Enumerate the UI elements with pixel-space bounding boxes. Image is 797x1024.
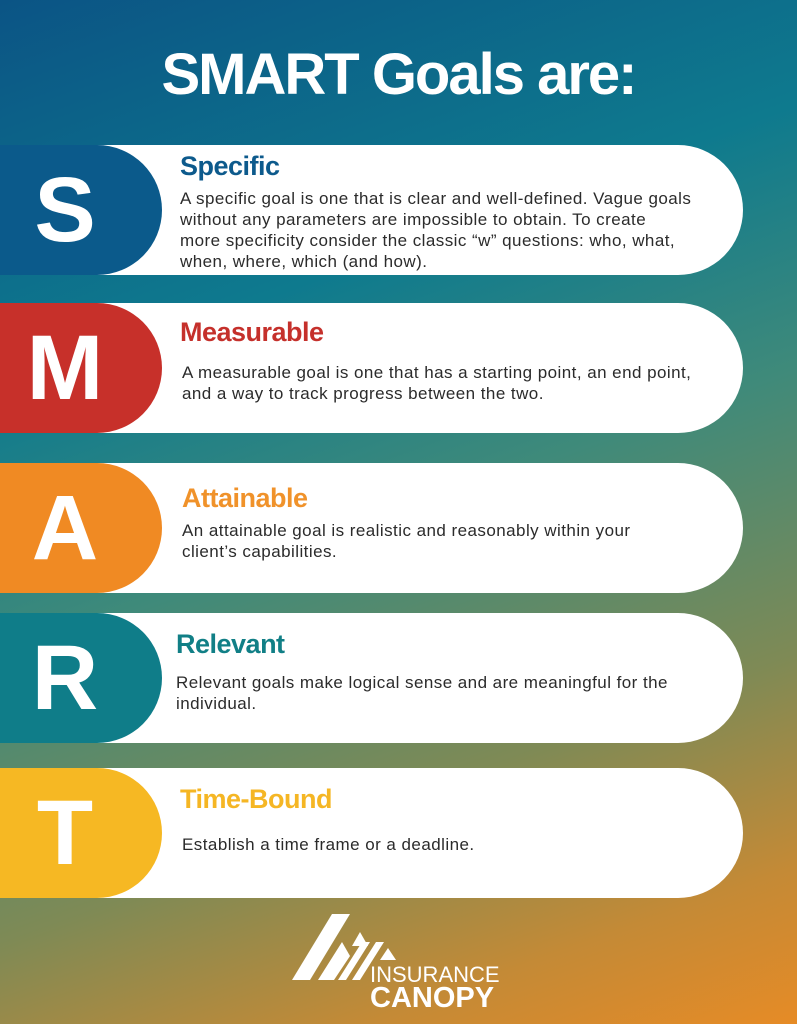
- heading: attainable: Attainable: [182, 483, 308, 513]
- letter tab T: T: [37, 782, 93, 884]
- letter tab R: [0, 613, 162, 743]
- panel: specific: [0, 145, 743, 275]
- heading: measurable: Measurable: [180, 317, 324, 347]
- text: time-bound: Establish a time frame or a deadline.: [182, 835, 475, 854]
- heading: relevant: Relevant: [176, 629, 285, 659]
- panel: attainable: [0, 463, 743, 593]
- letter tab M: M: [27, 317, 103, 419]
- text: specific: more specificity consider the classic “w” questions: who, what,: [180, 231, 675, 250]
- letter tab A: A: [32, 477, 98, 579]
- letter tab R: R: [32, 627, 98, 729]
- logo: insurance canopy: INSURANCE: [370, 962, 500, 987]
- letter tab M: [0, 303, 162, 433]
- text: attainable: [182, 521, 631, 561]
- panel: measurable: [0, 303, 743, 433]
- text: specific: A specific goal is one that is clear and well-defined. Vague goals: [180, 189, 691, 208]
- panel: time-bound: [0, 768, 743, 898]
- letter tab S: S: [34, 159, 96, 261]
- text: measurable: and a way to track progress between the two.: [182, 384, 544, 403]
- letter tab A: [0, 463, 162, 593]
- text: attainable: An attainable goal is realistic and reasonably within your: [182, 521, 631, 540]
- text: relevant: Relevant goals make logical sense and are meaningful for the: [176, 673, 668, 692]
- text: relevant: individual.: [176, 694, 257, 713]
- logo: insurance canopy: [292, 914, 500, 1012]
- letter tab S: [0, 145, 162, 275]
- panel: relevant: [0, 613, 743, 743]
- title: SMART Goals are:: [162, 42, 636, 107]
- text: measurable: A measurable goal is one that has a starting point, an end point,: [182, 363, 691, 382]
- text: specific: [180, 189, 691, 271]
- text: relevant: [176, 673, 668, 713]
- text: attainable: client’s capabilities.: [182, 542, 337, 561]
- heading: specific: Specific: [180, 151, 280, 181]
- text: measurable: [182, 363, 691, 403]
- text: specific: when, where, which (and how).: [180, 252, 427, 271]
- text: specific: without any parameters are impossible to obtain. To create: [180, 210, 646, 229]
- letter tab T: [0, 768, 162, 898]
- heading: time-bound: Time-Bound: [180, 784, 332, 814]
